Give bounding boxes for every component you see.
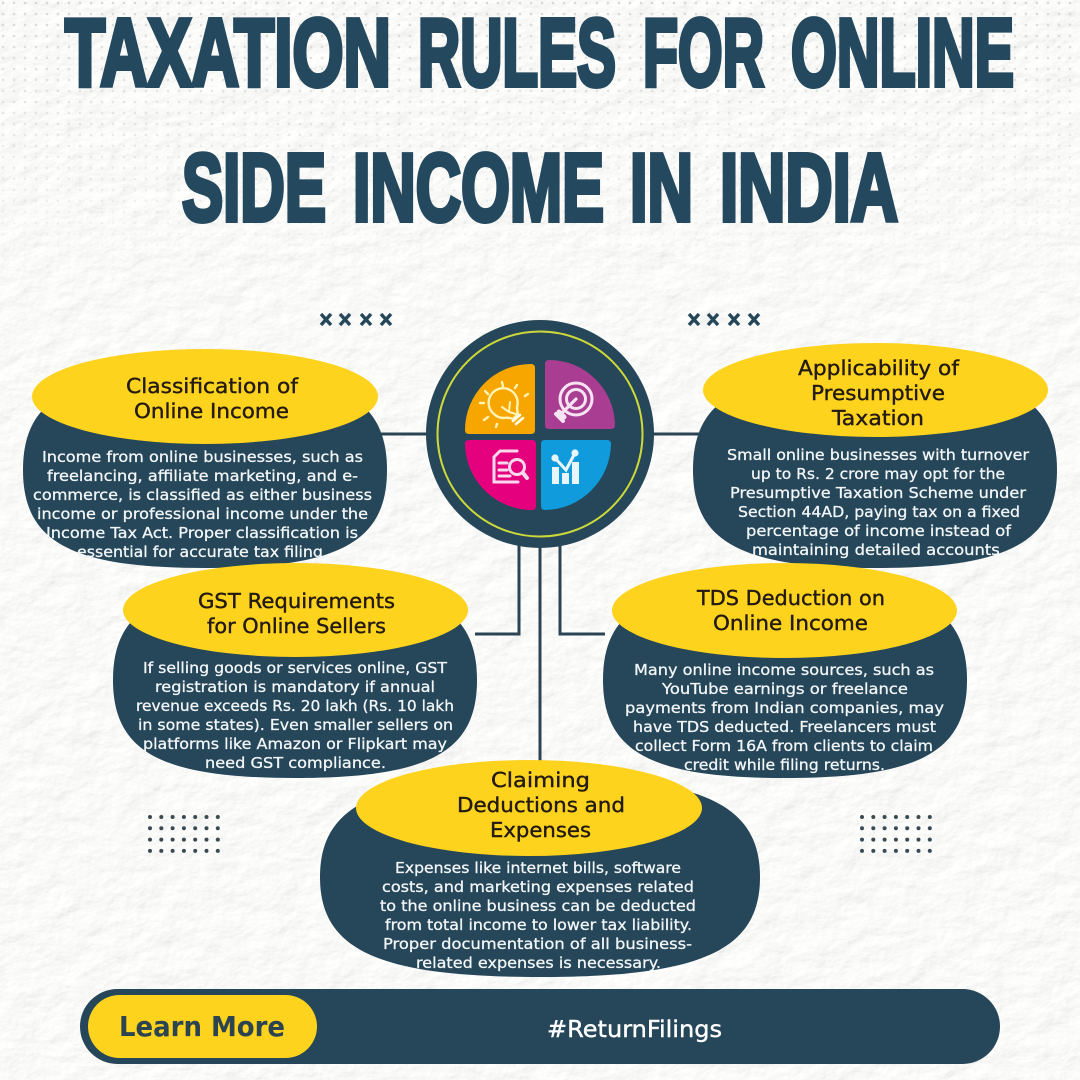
title: TAXATION <box>65 0 391 106</box>
heading: classification <box>126 374 299 423</box>
text block: gst body <box>136 659 454 772</box>
text block: gst body: in some states). Even smaller sellers on <box>138 716 453 734</box>
text block: gst body: platforms like Amazon or Flipkart may <box>143 735 447 753</box>
title: IN <box>630 134 693 242</box>
heading: deductions: Deductions and <box>457 793 625 817</box>
heading: deductions: Expenses <box>490 818 591 842</box>
heading: deductions <box>457 768 625 842</box>
text block: classification body: essential for accurate tax filing. <box>77 543 328 561</box>
text block: classification body <box>33 448 372 561</box>
text block: classification body: Income Tax Act. Proper classification is <box>46 524 358 542</box>
text block: tds body: collect Form 16A from clients to claim <box>635 737 933 755</box>
title: INCOME <box>353 134 604 242</box>
heading: presumptive: Taxation <box>831 406 924 430</box>
text block: deductions body <box>380 859 696 972</box>
text block: presumptive body: up to Rs. 2 crore may opt for the <box>751 465 1005 483</box>
title: RULES <box>418 0 616 106</box>
title: SIDE <box>182 134 326 242</box>
title: FOR <box>643 0 764 106</box>
heading: presumptive: Presumptive <box>811 381 945 405</box>
heading: classification: Classification of <box>126 374 299 398</box>
icon: document search quadrant <box>465 440 536 510</box>
heading: presumptive <box>798 356 960 430</box>
title <box>65 0 1014 242</box>
hashtag: #ReturnFilings <box>547 1017 722 1043</box>
text block: tds body: payments from Indian companies, may <box>625 699 944 717</box>
text block: tds body: credit while filing returns. <box>684 756 885 774</box>
panel: applicability of presumptive taxation <box>693 343 1057 568</box>
panel: tds deduction <box>603 563 967 778</box>
text block: presumptive body: Section 44AD, paying tax on a fixed <box>738 503 1020 521</box>
decorative x marks left <box>321 314 391 325</box>
text block: deductions body: Proper documentation of all business- <box>383 935 692 953</box>
heading: tds: Online Income <box>713 611 868 635</box>
panel: classification of online income <box>23 349 387 568</box>
text block: presumptive body <box>727 446 1030 559</box>
heading: presumptive: Applicability of <box>798 356 960 380</box>
connector lines <box>375 434 710 775</box>
heading: classification: Online Income <box>134 399 289 423</box>
heading: gst <box>198 589 395 638</box>
icon: light bulb quadrant <box>465 364 535 434</box>
text block: deductions body: costs, and marketing expenses related <box>382 878 694 896</box>
heading: gst: for Online Sellers <box>207 614 386 638</box>
heading: gst: GST Requirements <box>198 589 395 613</box>
text block: presumptive body: maintaining detailed accounts. <box>752 541 1005 559</box>
text block: deductions body: from total income to lower tax liability. <box>385 916 692 934</box>
text block: tds body: have TDS deducted. Freelancers must <box>633 718 936 736</box>
title: INDIA <box>720 134 898 242</box>
heading: deductions: Claiming <box>491 768 590 792</box>
decorative dot grid right <box>860 815 932 853</box>
decorative dot grid left <box>148 815 220 853</box>
text block: gst body: need GST compliance. <box>205 754 386 772</box>
text block: deductions body: to the online business can be deducted <box>380 897 696 915</box>
text block: classification body: commerce, is classified as either business <box>33 486 372 504</box>
text block: classification body: Income from online businesses, such as <box>42 448 363 466</box>
panel: gst requirements <box>113 563 477 778</box>
text block: gst body: registration is mandatory if annual <box>155 678 435 696</box>
button: learn more <box>88 995 317 1058</box>
footer bar <box>80 989 1000 1064</box>
text block: presumptive body: Small online businesses with turnover <box>727 446 1030 464</box>
heading: tds <box>696 586 885 635</box>
text block: gst body: revenue exceeds Rs. 20 lakh (Rs. 10 lakh <box>136 697 454 715</box>
text block: tds body <box>625 661 944 774</box>
text block: classification body: freelancing, affiliate marketing, and e- <box>47 467 358 485</box>
button: learn more: Learn More <box>119 1010 285 1043</box>
heading: tds: TDS Deduction on <box>696 586 885 610</box>
text block: tds body: YouTube earnings or freelance <box>661 680 908 698</box>
text block: classification body: income or professional income under the <box>37 505 368 523</box>
text block: deductions body: related expenses is necessary. <box>416 954 661 972</box>
text block: deductions body: Expenses like internet bills, software <box>395 859 681 877</box>
panel: claiming deductions and expenses <box>320 760 760 977</box>
text block: tds body: Many online income sources, such as <box>634 661 934 679</box>
central hub <box>426 320 654 548</box>
text block: gst body: If selling goods or services online, GST <box>143 659 448 677</box>
decorative x marks right <box>689 314 759 325</box>
text block: presumptive body: percentage of income instead of <box>746 522 1012 540</box>
icon: bar chart quadrant <box>541 440 611 510</box>
text block: presumptive body: Presumptive Taxation Scheme under <box>730 484 1027 502</box>
icon: target quadrant <box>545 360 615 429</box>
